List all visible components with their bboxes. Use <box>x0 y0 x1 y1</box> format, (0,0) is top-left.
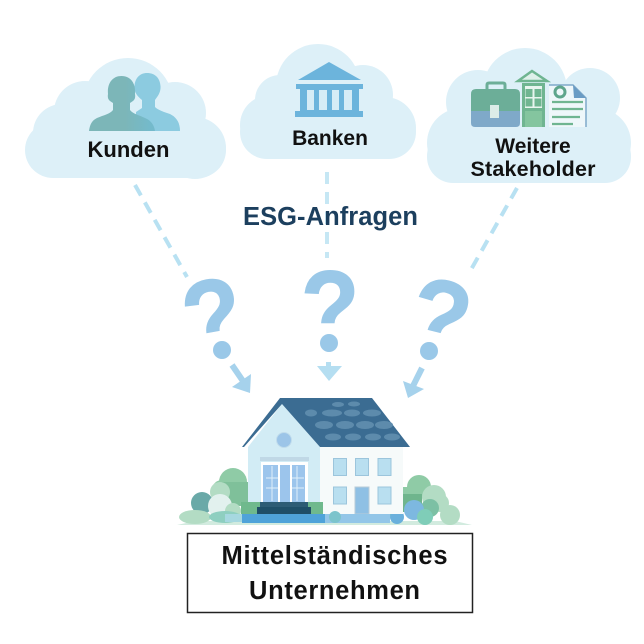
dashed connector: Banken <box>325 172 329 258</box>
label box: Mittelständisches Unternehmen: Unternehmen <box>249 577 420 605</box>
arrow left <box>232 365 251 393</box>
label box: Mittelständisches Unternehmen: Mittelständisches <box>222 542 448 570</box>
label: Weitere Stakeholder: Stakeholder <box>470 157 596 181</box>
label: Banken: Banken <box>292 127 368 150</box>
ground <box>177 521 472 525</box>
label: Kunden: Kunden <box>88 137 169 162</box>
side door <box>355 487 369 514</box>
cloud shape <box>427 48 631 183</box>
illustration: house with bushes <box>177 398 472 525</box>
question mark left <box>184 278 234 359</box>
question mark middle: ? <box>301 249 359 368</box>
icon: briefcase <box>471 83 520 127</box>
icon: two people <box>89 73 180 131</box>
front path <box>242 511 390 523</box>
round window <box>276 432 292 448</box>
question mark left: ? <box>173 253 252 381</box>
icon: bank building <box>295 62 363 117</box>
entrance steps <box>241 502 323 514</box>
icon: document <box>549 85 586 127</box>
bushes left <box>179 468 248 524</box>
panel: Banken cloud <box>240 44 416 159</box>
question mark right: ? <box>397 252 483 382</box>
cloud shape <box>240 44 416 159</box>
label: Weitere Stakeholder: Weitere <box>495 135 571 158</box>
icon: small house <box>518 71 547 127</box>
heading: ESG-Anfragen: ESG-Anfragen <box>243 203 418 231</box>
right wing <box>320 447 403 514</box>
arrow right <box>403 368 424 398</box>
cloud shape <box>25 58 226 179</box>
label: Weitere Stakeholder <box>470 135 596 181</box>
panel: Weitere Stakeholder cloud <box>427 48 631 183</box>
entrance door <box>260 457 309 502</box>
roof <box>242 398 410 447</box>
windows right wing <box>334 458 391 504</box>
dashed connector: Stakeholder <box>468 188 517 275</box>
bushes right <box>387 475 460 525</box>
question mark middle <box>304 270 354 352</box>
label box: Mittelständisches Unternehmen <box>188 534 472 612</box>
dashed connector: Kunden <box>135 185 187 277</box>
left gable wall <box>248 404 320 503</box>
question mark right <box>418 280 468 360</box>
arrow middle <box>317 362 342 381</box>
panel: Kunden cloud <box>25 58 226 179</box>
